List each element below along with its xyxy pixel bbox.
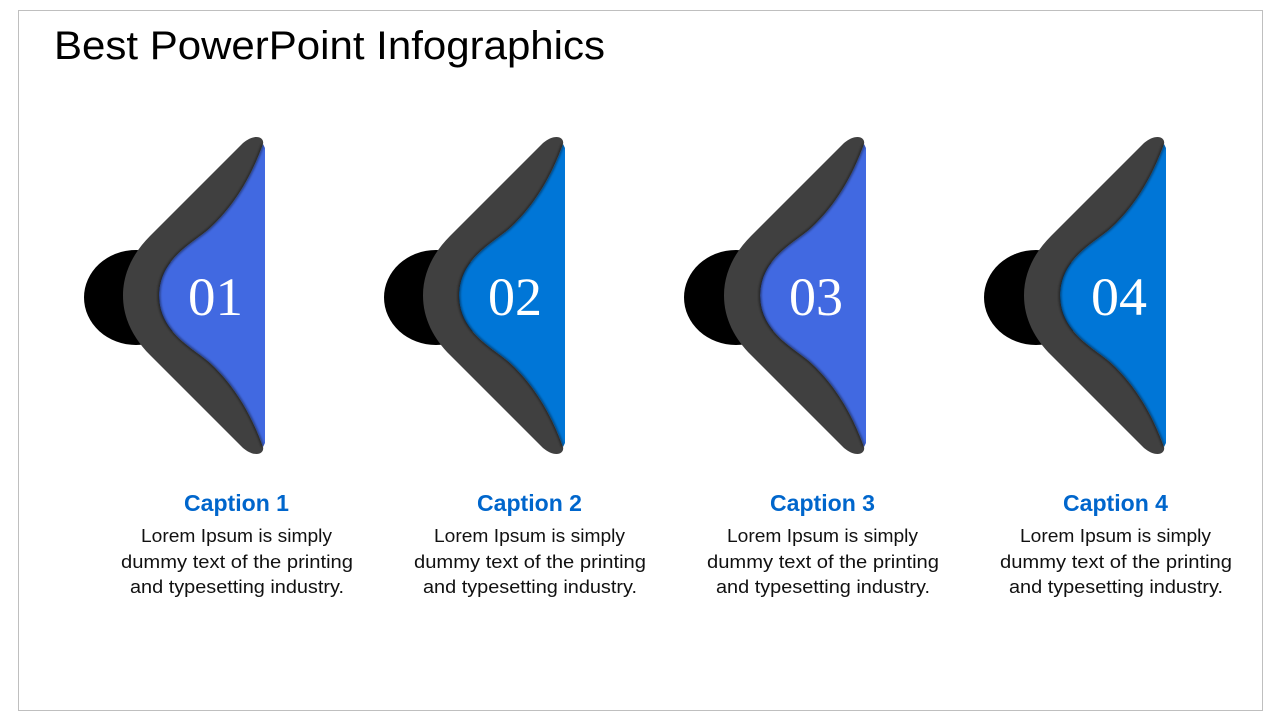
caption block 3: Lorem Ipsum is simply xyxy=(727,526,918,546)
caption block 1: and typesetting industry. xyxy=(130,577,344,597)
icon: step 1 shape: 01 xyxy=(188,267,243,327)
caption block 2 xyxy=(414,490,646,597)
caption block 4: Caption 4 xyxy=(1063,490,1168,516)
caption block 4: dummy text of the printing xyxy=(1000,552,1232,572)
caption block 4: and typesetting industry. xyxy=(1009,577,1223,597)
icon: step 1 shape xyxy=(84,137,265,454)
icon: step 4 shape xyxy=(984,137,1166,454)
caption block 1: dummy text of the printing xyxy=(121,552,353,572)
title: Best PowerPoint Infographics xyxy=(54,24,605,68)
caption block 2: and typesetting industry. xyxy=(423,577,637,597)
icon: step 3 shape xyxy=(684,137,866,454)
caption block 3: Caption 3 xyxy=(770,490,875,516)
caption block 2: dummy text of the printing xyxy=(414,552,646,572)
icon: step 3 shape: 03 xyxy=(789,267,843,327)
caption block 2: Caption 2 xyxy=(477,490,582,516)
caption block 1: Caption 1 xyxy=(184,490,289,516)
caption block 3: dummy text of the printing xyxy=(707,552,939,572)
icon: step 2 shape: 02 xyxy=(488,267,542,327)
caption block 4 xyxy=(1000,490,1232,597)
icon: step 2 shape xyxy=(384,137,565,454)
caption block 3 xyxy=(707,490,939,597)
caption block 1 xyxy=(121,490,353,597)
caption block 2: Lorem Ipsum is simply xyxy=(434,526,625,546)
caption block 4: Lorem Ipsum is simply xyxy=(1020,526,1211,546)
icon: step 4 shape: 04 xyxy=(1091,267,1147,327)
caption block 3: and typesetting industry. xyxy=(716,577,930,597)
caption block 1: Lorem Ipsum is simply xyxy=(141,526,332,546)
